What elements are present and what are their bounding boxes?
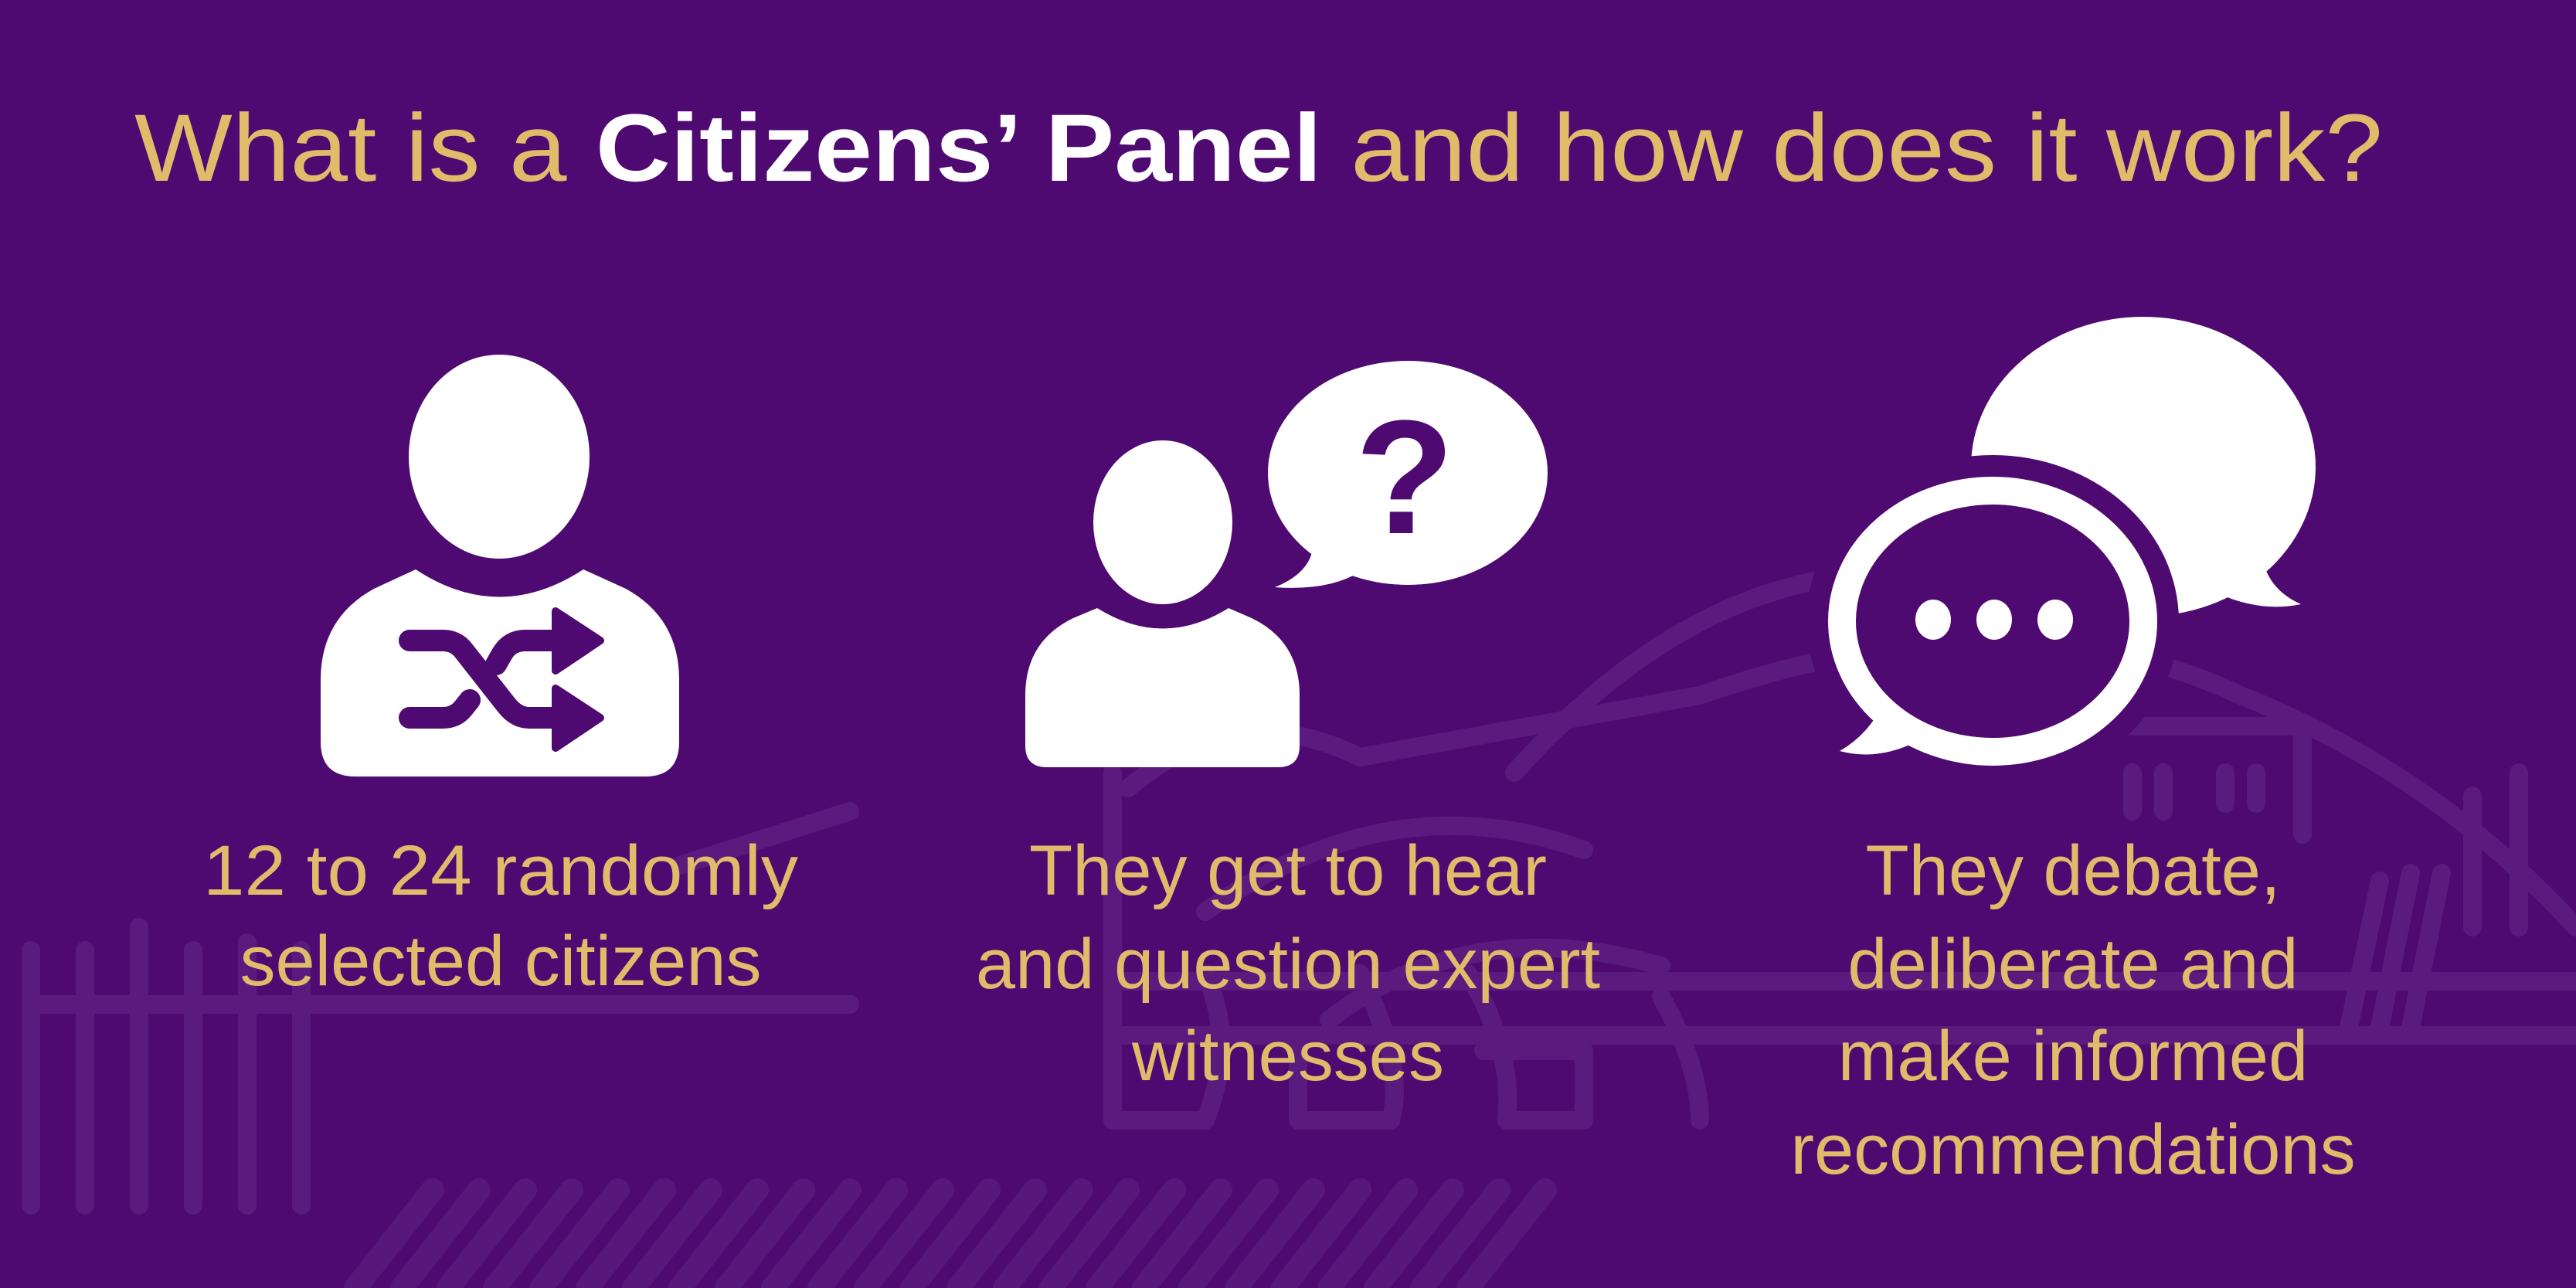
text: column 3: make informed xyxy=(1838,1017,2308,1096)
icon: person with question bubble: ? xyxy=(1355,386,1454,568)
text: column 2: witnesses xyxy=(1131,1017,1444,1096)
text: column 2: and question expert xyxy=(976,925,1600,1004)
icon: person with shuffle xyxy=(321,355,679,777)
text: column 3: deliberate and xyxy=(1847,925,2299,1004)
text: column 3: They debate, xyxy=(1865,831,2281,910)
text: column 2: They get to hear xyxy=(1029,831,1547,910)
title: What is a Citizens’ Panel and how does it work? xyxy=(134,95,2383,202)
text: column 3: recommendations xyxy=(1790,1110,2356,1189)
text: column 1: 12 to 24 randomly xyxy=(203,831,798,910)
icon: conversation bubbles xyxy=(1806,317,2316,787)
text: column 1: selected citizens xyxy=(240,922,762,1001)
icon: person with question bubble xyxy=(1025,361,1548,767)
